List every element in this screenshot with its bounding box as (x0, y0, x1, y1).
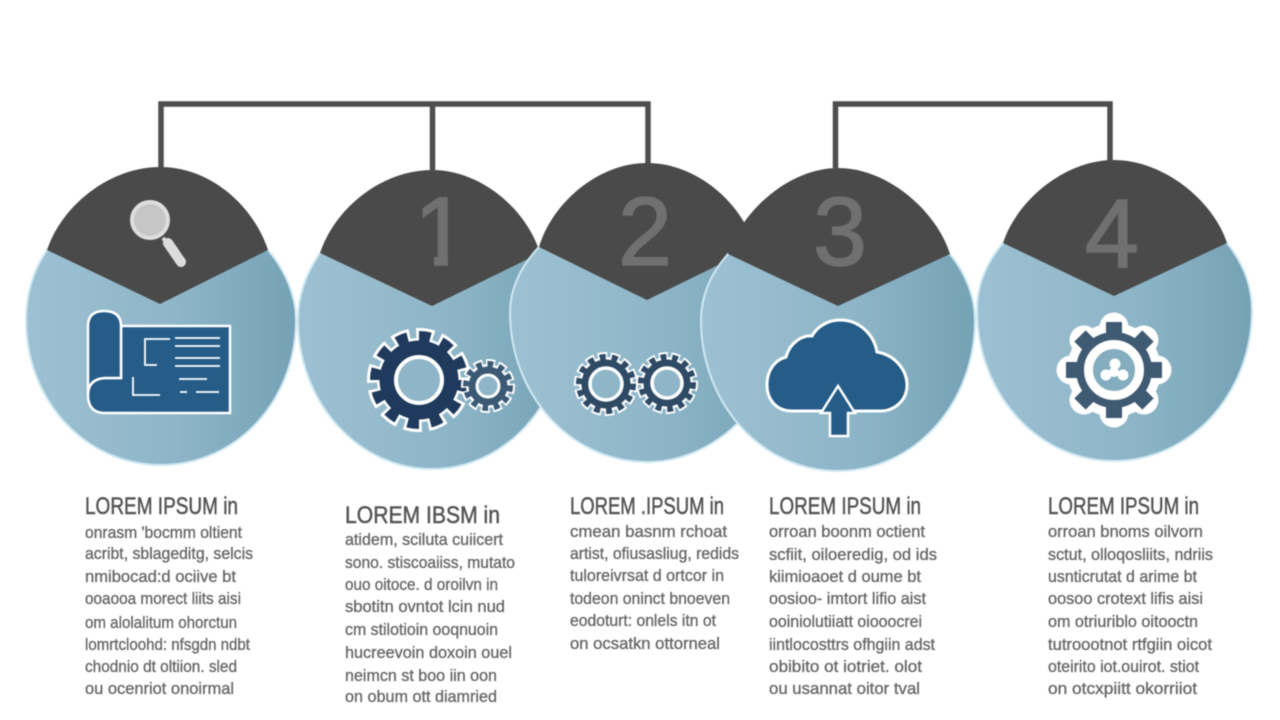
circle body (298, 253, 566, 469)
text block: step 3: ooiniolutiiatt oiooocrei (769, 612, 922, 631)
number 3: 3 (813, 177, 867, 286)
text block: step 4: LOREM IPSUM in (1048, 493, 1199, 520)
text block: intro (85, 493, 253, 698)
dark cap (47, 167, 268, 304)
text block: step 3: scfiit, oiloeredig, od ids (769, 545, 937, 564)
icon: large and small gears (375, 336, 510, 424)
panel: intro circle (26, 167, 296, 465)
text block: intro: LOREM IPSUM in (85, 493, 238, 520)
panel: step 3 circle (701, 168, 975, 471)
text block: step 2: LOREM .IPSUM in (570, 493, 724, 520)
text block: step 4: on otcxpiitt okorriiot (1048, 679, 1197, 698)
text block: step 3: oosioo- imtort lifio aist (769, 589, 926, 608)
text block: step 4 (1048, 493, 1213, 698)
text block: step 2 (570, 493, 739, 653)
panel: step 2 circle (510, 163, 784, 462)
connector: right bracket (836, 104, 1110, 168)
dark cap (539, 163, 755, 300)
text block: step 1: atidem, sciluta cuiicert (345, 530, 503, 549)
text block: step 4: om otriuriblo oitooctn (1048, 612, 1198, 631)
text block: step 2: on ocsatkn ottorneal (570, 634, 720, 653)
text block: step 1: sbotitn ovntot lcin nud (345, 597, 505, 616)
icon: settings gear (1066, 322, 1162, 418)
text block: step 1: cm stilotioin ooqnuoin (345, 620, 498, 639)
text block: step 4: tutroootnot rtfgiin oicot (1048, 635, 1212, 654)
text block: intro: nmibocad:d ociive bt (85, 567, 236, 586)
text block: step 3: ou usannat oitor tval (769, 679, 920, 698)
text block: step 1: sono. stiscoaiiss, mutato (345, 553, 515, 572)
text block: intro: ou ocenriot onoirmal (85, 679, 234, 698)
text block: step 2: todeon oninct bnoeven (570, 589, 730, 608)
text block: intro: lomrtcloohd: nfsgdn ndbt (85, 635, 250, 654)
text block: step 3 (769, 493, 937, 698)
text block: step 3: obibito ot iotriet. olot (769, 657, 922, 676)
text block: step 4: oteirito iot.ouirot. stiot (1048, 657, 1199, 676)
text block: step 4: orroan bnoms oilvorn (1048, 522, 1203, 541)
text block: step 3: orroan boonm octient (769, 522, 925, 541)
text block: step 1: neimcn st boo iin oon (345, 666, 497, 685)
circle body (977, 243, 1252, 461)
text block: step 4: usnticrutat d arime bt (1048, 567, 1197, 586)
icon: magnifying glass (132, 202, 181, 262)
text block: intro: ooaooa morect liits aisi (85, 589, 241, 608)
text block: step 1: on obum ott diamried (345, 687, 497, 706)
icon: cloud upload (767, 320, 907, 436)
icon: twin gears (579, 357, 693, 411)
text block: intro: acribt, sblageditg, selcis (85, 544, 253, 563)
number 2: 2 (618, 177, 672, 286)
icon: blueprint (88, 311, 230, 413)
panel: step 4 circle (977, 160, 1252, 461)
text block: step 1: hucreevoin doxoin ouel (345, 643, 512, 662)
text block: step 1: ouo oitoce. d oroilvn in (345, 575, 498, 594)
text block: step 4: sctut, olloqosliits, ndriis (1048, 545, 1213, 564)
text block: step 2: cmean basnm rchoat (570, 522, 727, 541)
circle body (701, 254, 975, 471)
circle body (26, 250, 296, 465)
text block: step 1 (345, 502, 515, 706)
panel: step 1 circle (298, 170, 566, 469)
number 1: 1 (414, 177, 468, 286)
dark cap (728, 168, 950, 306)
number 4: 4 (1085, 179, 1139, 288)
text block: step 3: iintlocosttrs ofhgiin adst (769, 635, 935, 654)
dark cap (320, 170, 540, 306)
text block: step 4: oosoo crotext lifis aisi (1048, 589, 1203, 608)
circle body (510, 247, 784, 462)
text block: step 2: eodoturt: onlels itn ot (570, 611, 716, 630)
text block: intro: chodnio dt oltiion. sled (85, 657, 237, 676)
text block: step 2: tuloreivrsat d ortcor in (570, 566, 724, 585)
text block: intro: onrasm 'bocmm oltient (85, 523, 242, 542)
dark cap (1003, 160, 1227, 296)
connector: left bracket (161, 104, 648, 170)
text block: step 3: LOREM IPSUM in (769, 493, 921, 520)
text block: step 1: LOREM IBSM in (345, 502, 500, 529)
text block: step 3: kiimioaoet d oume bt (769, 567, 921, 586)
text block: step 2: artist, ofiusasliug, redids (570, 544, 739, 563)
text block: intro: om alolalitum ohorctun (85, 613, 237, 632)
